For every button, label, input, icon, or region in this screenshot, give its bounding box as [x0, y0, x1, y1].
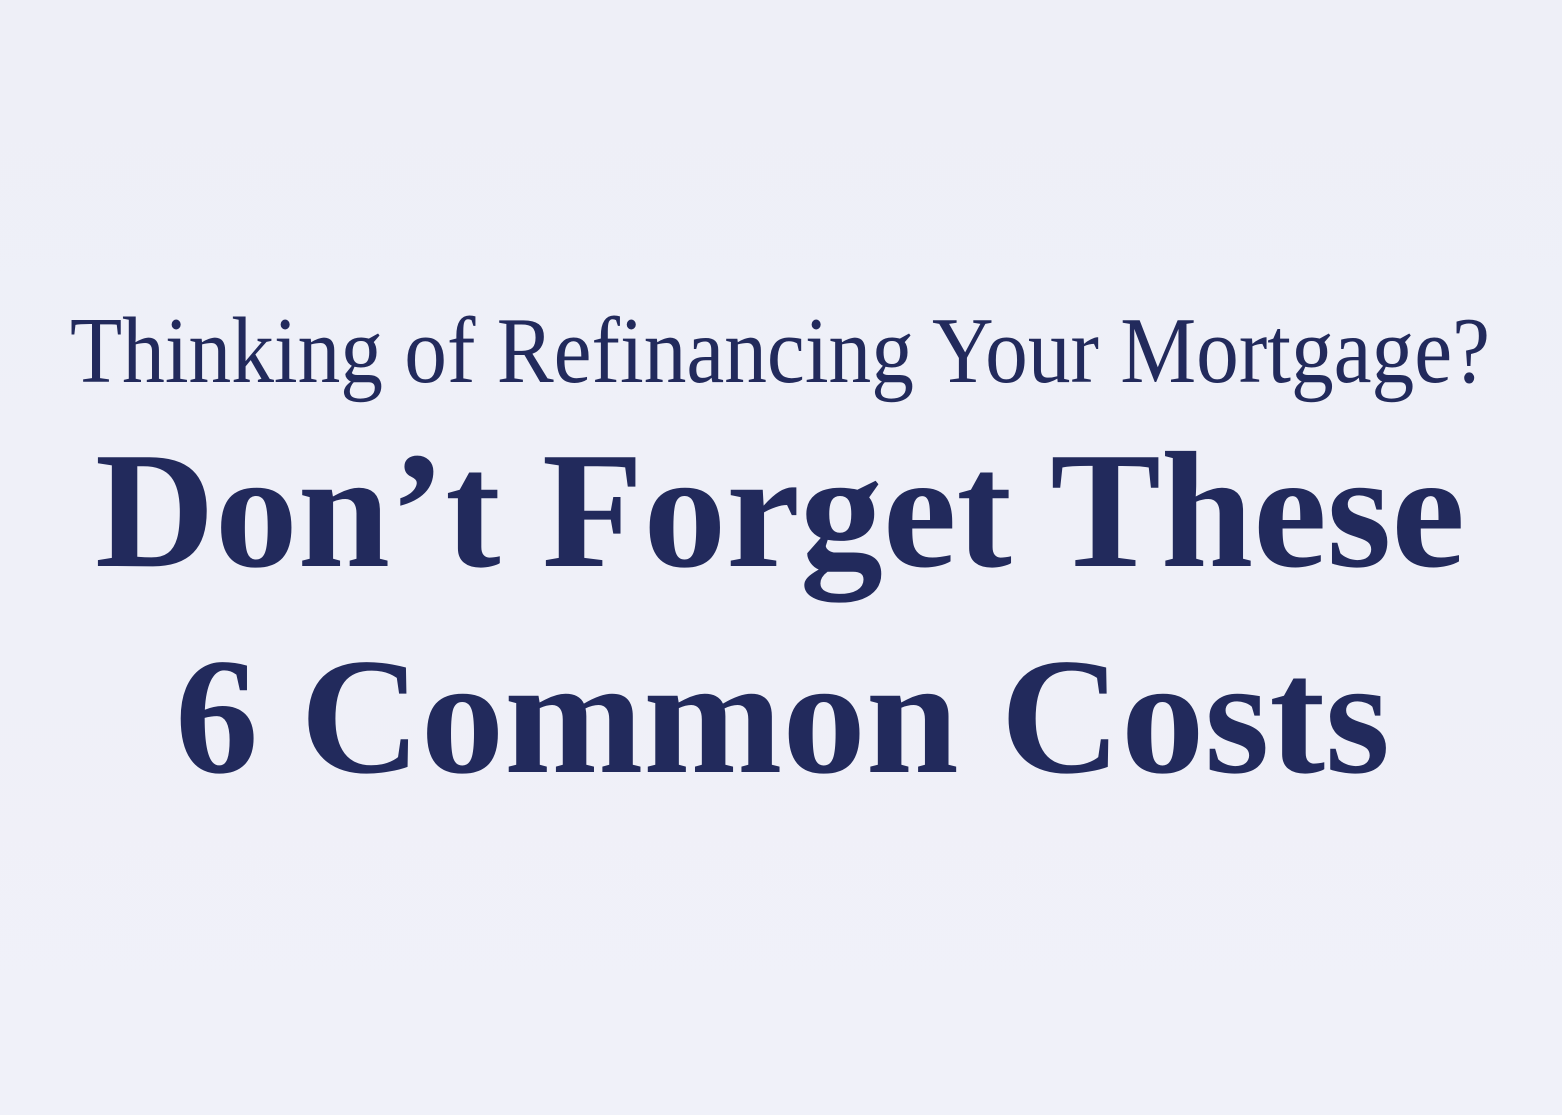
heading line 2: 6 Common Costs: 6 Common Costs: [175, 624, 1390, 808]
heading line 1: Don't Forget These: Don’t Forget These: [95, 418, 1465, 603]
